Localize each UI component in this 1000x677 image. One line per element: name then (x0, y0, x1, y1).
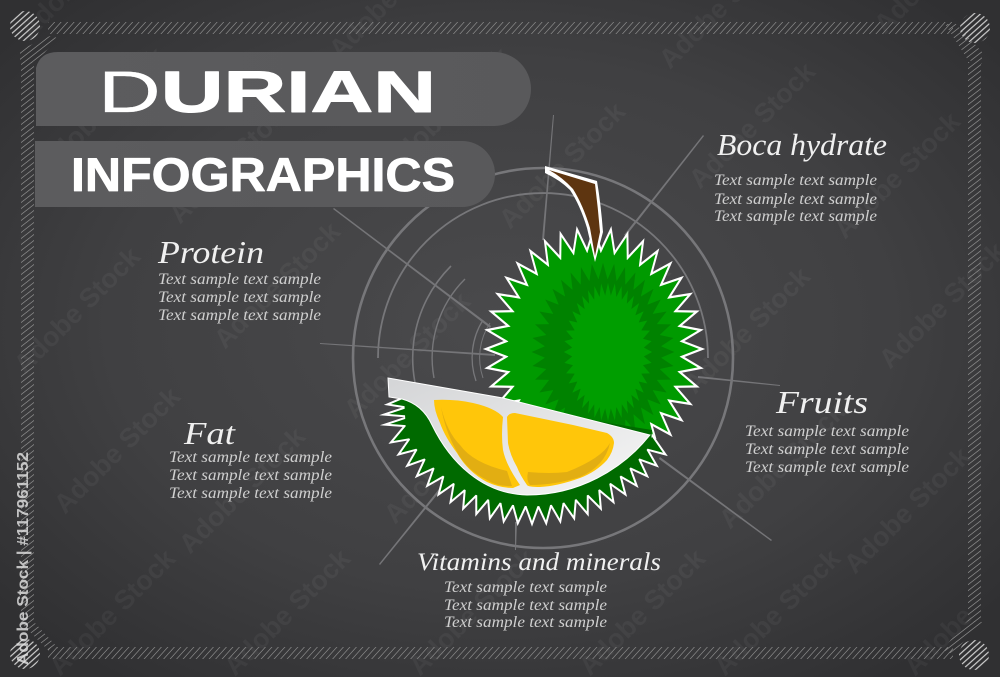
slice rind (388, 378, 650, 495)
stock id vertical label: Adobe Stock | #117961152 (15, 452, 32, 665)
radial spokes (320, 115, 780, 565)
watermarks: Adobe Stock (538, 256, 677, 394)
watermarks: Adobe Stock (163, 91, 302, 229)
left fruit shadow (441, 407, 512, 486)
section: vitamins and minerals: Text sample text sample (444, 614, 607, 631)
watermarks: Adobe Stock (493, 96, 632, 234)
title banner: infographics: INFOGRAPHICS (71, 148, 455, 201)
section: vitamins and minerals: Vitamins and minerals (417, 549, 661, 576)
section: fat: Text sample text sample (169, 485, 332, 502)
title banner: durian: D URIAN (98, 60, 436, 125)
watermarks: Adobe Stock (8, 241, 147, 379)
section: vitamins and minerals: Text sample text sample (444, 579, 607, 596)
section: boca hydrate: Boca hydrate (717, 127, 887, 162)
section: fruits: Text sample text sample (745, 459, 909, 476)
watermarks: Adobe Stock (678, 261, 817, 399)
concentric target rings (353, 168, 733, 548)
section: boca hydrate: Text sample text sample (714, 208, 877, 225)
section: fat: Text sample text sample (169, 467, 332, 484)
right fruit shadow (527, 443, 610, 485)
section: fat (169, 415, 332, 502)
section: boca hydrate (714, 127, 887, 225)
watermarks: Adobe Stock (48, 381, 187, 519)
section: protein: Text sample text sample (158, 271, 321, 288)
section: protein (157, 234, 321, 324)
right fruit segment (507, 413, 614, 487)
slice spikes (389, 398, 667, 521)
watermarks: Adobe Stock (828, 106, 967, 244)
watermarks: Adobe Stock (173, 421, 312, 559)
watermarks: Adobe Stock (208, 216, 347, 354)
watermarks: Adobe Stock (713, 396, 852, 534)
section: vitamins and minerals (417, 549, 661, 631)
section: fat: Text sample text sample (169, 449, 332, 466)
section: fruits: Fruits (775, 384, 868, 420)
section: boca hydrate: Text sample text sample (714, 172, 877, 189)
icon: durian stem (545, 166, 603, 262)
watermarks: Adobe Stock (338, 286, 477, 424)
section: fruits: Text sample text sample (745, 423, 909, 440)
section: boca hydrate: Text sample text sample (714, 191, 877, 208)
slice husk (404, 392, 652, 506)
section: fruits: Text sample text sample (745, 441, 909, 458)
icon: whole durian fruit (489, 231, 699, 467)
watermarks: Adobe Stock (378, 391, 517, 529)
watermarks: Adobe Stock (33, 41, 172, 179)
watermarks: Adobe Stock (683, 56, 822, 194)
section: fruits (745, 384, 909, 476)
title banner: infographics (35, 141, 495, 207)
title banner: durian (36, 52, 531, 126)
section: protein: Text sample text sample (158, 289, 321, 306)
section: fat: Fat (183, 415, 236, 451)
icon: durian slice (388, 378, 667, 521)
section: protein: Text sample text sample (158, 307, 321, 324)
watermarks: Adobe Stock (838, 441, 977, 579)
section: vitamins and minerals: Text sample text sample (444, 597, 607, 614)
left fruit segment (434, 400, 520, 488)
watermarks: Adobe Stock (378, 41, 517, 179)
section: protein: Protein (157, 234, 264, 270)
